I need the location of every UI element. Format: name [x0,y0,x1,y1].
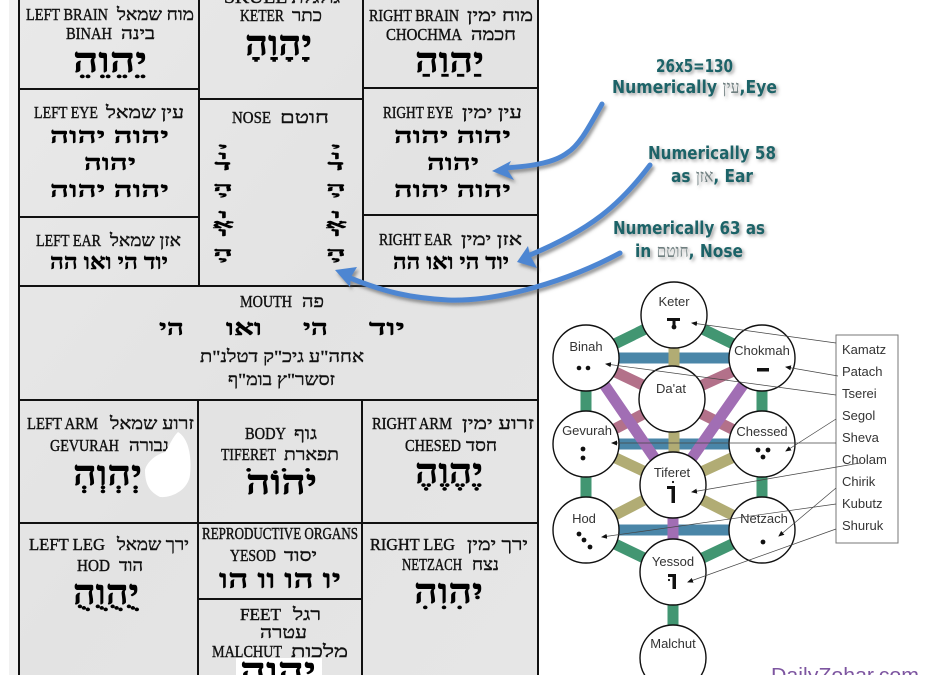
nose left column letters: י [219,190,227,203]
arrow: to right ear [517,165,650,268]
cell: left leg hod: ירך שמאל [116,535,189,554]
cell: left arm gevurah: יְהְוְהְ [73,456,142,493]
cell: nose: חוטם [280,108,329,127]
cell: mouth: זסשר"ץ בומ"ף [228,370,335,389]
cell: right leg netzach [370,535,528,611]
sefirah: Chessed [729,411,795,477]
connecting paths [586,315,762,658]
nose right column letters: ה [326,181,346,194]
cell: nose [212,108,347,268]
cell: left ear [36,231,181,274]
cell: right eye [383,103,522,202]
scanned chart of body and divine names [9,0,538,675]
cell: left arm gevurah [27,414,194,497]
cell: left eye: יהוה יהוה [50,123,169,148]
cell: right leg netzach: נצח [472,555,499,574]
cell: skull keter: KETER [240,6,285,25]
cell: left eye: יהוה [84,150,136,175]
nose right column letters: י [332,255,340,268]
cell: left eye: עין שמאל [105,103,184,122]
cell: right leg netzach: RIGHT LEG [370,535,455,554]
sefirah: Chokmah [729,325,795,391]
cell: reproductive organs yesod: YESOD [230,546,276,565]
cell: right leg netzach: יִהִוִהִ [414,574,483,611]
sefirah: Chokmah: Chokmah [734,343,790,358]
cell: left arm gevurah: LEFT ARM [27,414,98,433]
cell: right eye: יהוה יהוה [394,123,511,148]
cell: feet malchut: MALCHUT [212,642,283,661]
cell: body tiferet: גוף [294,424,317,443]
sefirah: Da'at: Da'at [656,381,686,396]
sefirah: Gevurah [553,411,619,477]
cell: right brain chochma: יַהַוַהַ [415,43,484,80]
cell: left eye: יהוה יהוה [50,177,169,202]
cell: mouth [159,292,405,389]
cell: left brain binah: מוח שמאל [116,5,194,24]
cell: right arm chesed: זרוע ימין [462,414,534,433]
cell: left eye: LEFT EYE [34,103,98,122]
sefirah: Gevurah: Gevurah [562,423,612,438]
cell: right arm chesed: RIGHT ARM [372,414,452,433]
vowel legend box: Shuruk [842,518,884,533]
cell: left brain binah: LEFT BRAIN [26,5,108,24]
sefirah: Keter: Keter [658,294,690,309]
cell: feet malchut: עטרה [260,623,307,642]
sefirah: Malchut: Malchut [650,636,696,651]
cell: right leg netzach: ירך ימין [467,535,528,554]
cell: left leg hod [29,535,189,612]
nose right column letters: ו [332,208,340,221]
cell: right ear: אזן ימין [461,230,522,249]
nose right column letters [325,142,347,268]
nose left column letters: ד [215,157,231,173]
nose left column letters [212,142,234,268]
cell: mouth: ואו [226,315,262,340]
cell: right leg netzach: NETZACH [402,555,462,574]
cell: reproductive organs yesod: יו הו וו הו [219,565,341,594]
annotation: ear numerology [648,143,776,187]
nose left column letters: י [219,142,227,154]
cell: left brain binah: בינה [121,24,155,43]
sefirah: Yessod [640,539,706,605]
nose left column letters: ו [219,226,227,239]
nose left column letters: ו [219,150,227,162]
cell: right ear: יוד הי ואו הה [393,249,509,274]
cell: right arm chesed: יֶהֶוֶהֶ [415,454,483,491]
sefirah: Binah: Binah [569,339,603,354]
tree of life diagram [553,282,898,675]
sefirah: Hod [553,497,619,563]
cell: mouth: יוד [369,315,405,340]
cell: right eye: RIGHT EYE [383,103,453,122]
cell: left leg hod: יֻהֻוֻהֻ [73,575,139,612]
sefirah: Malchut [640,625,706,675]
sefirah: Tiferet: Tiferet [654,465,691,480]
annotation: eye numerology: 26x5=130 [656,56,733,77]
cell: mouth: אחה"ע גיכ"ק דטלנ"ת [200,347,364,366]
nose left column letters: א [212,218,234,231]
cell: skull keter [224,0,340,63]
cell: skull keter: כתר [292,6,322,25]
vowel legend box: Segol [842,408,875,423]
cell: left arm gevurah: זרוע שמאל [109,414,194,433]
cell: right ear [379,230,522,274]
cell: right brain chochma: RIGHT BRAIN [369,6,459,25]
white correction smudge [145,432,190,497]
sefirah: Netzach [729,497,795,563]
sefirah: Hod: Hod [572,511,596,526]
cell: mouth: MOUTH [240,292,292,311]
cell: mouth: פה [302,292,324,311]
cell: body tiferet: TIFERET [221,445,276,464]
cell: left leg hod: HOD [77,556,110,575]
annotation: ear numerology: as אזן, Ear [671,166,753,187]
annotation: nose numerology [613,218,765,262]
cell: right brain chochma [369,6,533,80]
nose right column letters: א [325,218,347,231]
cell: feet malchut: מלכות [291,642,348,661]
nose left column letters: ה [213,181,233,194]
cell: reproductive organs yesod [202,524,358,594]
cell: right eye: יהוה [427,150,479,175]
vowel legend box [836,335,898,543]
cell: right ear: RIGHT EAR [379,230,453,249]
nose right column letters: י [332,142,340,154]
nose right column letters: ו [332,150,340,162]
annotation: nose numerology: in חוטם, Nose [635,241,743,262]
cell: left eye [34,103,184,202]
cell: left ear: יוד הי ואו הה [50,249,168,274]
vowel legend box: Kamatz [842,342,886,357]
cell: body tiferet: תפארת [284,445,339,464]
cell: reproductive organs yesod: REPRODUCTIVE ORGANS [202,524,358,543]
cell: left leg hod: LEFT LEG [29,535,105,554]
cell: body tiferet: יֹהֹוֹהֹ [246,465,317,502]
nose right column letters: י [332,190,340,203]
sefirah: Netzach: Netzach [740,511,788,526]
nose right column letters: ה [326,246,346,259]
arrow: to right eye [492,104,602,180]
annotation: ear numerology: Numerically 58 [648,143,776,164]
cell: left ear: LEFT EAR [36,231,102,250]
vowel legend box: Tserei [842,386,877,401]
sefirah: Yessod: Yessod [652,554,694,569]
cell: feet malchut [212,605,348,675]
vowel legend box: Chirik [842,474,876,489]
cell: right arm chesed [372,414,534,491]
sefirah: Keter [641,282,707,348]
cell: feet malchut: רגל [292,605,321,624]
cell: left arm gevurah: גבורה [129,436,169,455]
cell: mouth: הי [159,315,184,340]
cell: right brain chochma: מוח ימין [467,6,533,25]
cell: left ear: אזן שמאל [109,231,181,250]
cell: right arm chesed: חסד [466,436,497,455]
cell: reproductive organs yesod: יסוד [284,546,317,565]
vowel legend box: Sheva [842,430,880,445]
cell: skull keter: יָהָוָהָ [245,26,312,63]
arrow: to nose [335,253,620,300]
cell: body tiferet [221,424,339,502]
cell: nose: NOSE [232,108,271,127]
cell: body tiferet: BODY [245,424,286,443]
vowel legend box: Patach [842,364,882,379]
nose right column letters: ד [328,157,344,173]
annotation: eye numerology [612,56,777,98]
cell: left arm gevurah: GEVURAH [50,436,119,455]
sefirah: Chessed: Chessed [736,424,788,439]
cell: left brain binah: יֵהֵוֵהֵ [73,43,147,80]
vowel legend box: Kubutz [842,496,882,511]
nose left column letters: י [219,255,227,268]
cell: right brain chochma: חכמה [471,25,516,44]
cell: left leg hod: הוד [119,556,143,575]
nose right column letters: ו [332,226,340,239]
sefirah: Binah [553,325,619,391]
cell: left brain binah: BINAH [66,24,112,43]
sefirah: Da'at [639,366,705,432]
cell: right brain chochma: CHOCHMA [386,25,463,44]
nose left column letters: ו [219,208,227,221]
nose left column letters: ה [213,246,233,259]
vowel legend box: Cholam [842,452,887,467]
cell: mouth: הי [303,315,328,340]
cell: right eye: יהוה יהוה [394,177,511,202]
annotation: nose numerology: Numerically 63 as [613,218,765,239]
cell: right arm chesed: CHESED [405,436,461,455]
annotation: eye numerology: Numerically עין,Eye [612,77,777,98]
legend pointer lines [602,323,860,582]
cell: left brain binah [26,5,194,80]
cell: feet malchut: FEET [240,605,282,624]
sefirah: Tiferet [640,452,706,518]
cell: right eye: עין ימין [462,103,522,122]
